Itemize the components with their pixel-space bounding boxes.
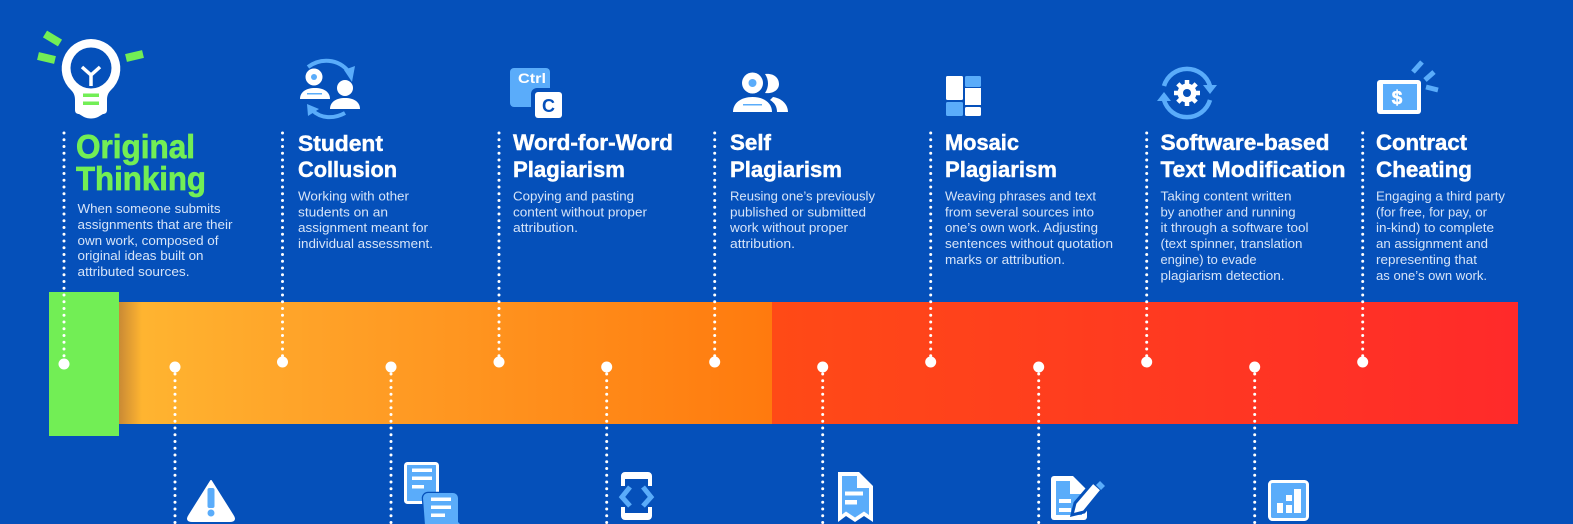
icon: bar chart screen — [1270, 482, 1308, 520]
connector: lower 5 — [1033, 362, 1044, 524]
text: mosaic description: from several sources into — [945, 206, 1094, 220]
icon: light bulb — [38, 34, 143, 118]
icon: document with chat bubble — [406, 464, 461, 524]
text: software-based description: plagiarism detection. — [1160, 269, 1284, 283]
icon: gear with cycle arrows — [1157, 69, 1217, 117]
text: original thinking description — [78, 202, 232, 279]
icon: torn document — [838, 472, 873, 522]
text: student collusion description: individual assessment. — [298, 237, 433, 251]
text: mosaic description — [945, 190, 1113, 267]
text: mosaic description: sentences without quotation — [945, 237, 1113, 251]
text: contract cheating description: as one’s own work. — [1376, 269, 1487, 283]
connector: mosaic — [925, 133, 936, 368]
text: student collusion description: students on an — [298, 206, 388, 220]
connector: original thinking — [58, 133, 70, 370]
text: student collusion description: assignment meant for — [298, 221, 428, 235]
text: self plagiarism description: work without proper — [729, 221, 848, 235]
heading: mosaic plagiarism — [945, 130, 1057, 182]
text: contract cheating description: representing that — [1376, 253, 1478, 267]
heading: original thinking: Thinking — [76, 160, 206, 197]
icon: ctrl c keys — [510, 68, 566, 122]
icon: mosaic blocks — [946, 76, 981, 116]
text: mosaic description: Weaving phrases and text — [945, 190, 1097, 204]
connector: lower 2 — [386, 362, 396, 524]
connector: word-for-word — [494, 133, 504, 368]
heading: original thinking: Original — [76, 128, 195, 165]
heading: original thinking — [76, 128, 206, 197]
text: software-based description: it through a software tool — [1160, 221, 1308, 235]
text: mosaic description: marks or attribution. — [945, 253, 1065, 267]
text: self plagiarism description — [729, 190, 876, 251]
severity spectrum bar — [119, 302, 1518, 424]
text: original thinking description: When someone submits — [78, 202, 220, 216]
text: word-for-word description — [513, 190, 647, 235]
text: self plagiarism description: attribution. — [730, 237, 795, 251]
text: software-based description: (text spinner, translation — [1160, 237, 1303, 251]
text: contract cheating description: an assignment and — [1376, 237, 1488, 251]
text: contract cheating description — [1376, 190, 1506, 283]
text: word-for-word description: content without proper — [513, 206, 647, 220]
heading: contract cheating: Cheating — [1376, 157, 1472, 182]
text: software-based description: engine) to evade — [1160, 253, 1257, 267]
heading: word-for-word plagiarism — [513, 130, 673, 182]
original thinking green block — [49, 292, 119, 436]
text: software-based description: by another and running — [1160, 206, 1296, 220]
heading: contract cheating — [1376, 130, 1472, 182]
heading: contract cheating: Contract — [1376, 130, 1468, 155]
icon: ctrl c keys: Ctrl — [518, 70, 546, 86]
text: software-based description: Taking content written — [1160, 190, 1292, 204]
icon: contract payment screen: $ — [1392, 88, 1403, 109]
connector: lower 3 — [601, 362, 612, 524]
text: original thinking description: attributed sources. — [78, 265, 190, 279]
text: original thinking description: own work, composed of — [78, 234, 219, 248]
text: word-for-word description: Copying and pasting — [513, 190, 634, 204]
heading: mosaic plagiarism: Mosaic — [945, 130, 1019, 155]
text: contract cheating description: in-kind) to complete — [1376, 221, 1494, 235]
text: contract cheating description: (for free, for pay, or — [1376, 206, 1487, 220]
heading: word-for-word plagiarism: Word-for-Word — [513, 130, 673, 155]
heading: mosaic plagiarism: Plagiarism — [945, 157, 1057, 182]
icon: self plagiarism people — [733, 72, 788, 112]
text: student collusion description: Working with other — [298, 190, 409, 204]
icon: code brackets — [621, 472, 652, 520]
heading: software-based text modification — [1160, 130, 1346, 182]
connector: self plagiarism — [709, 133, 720, 368]
connector: student collusion — [277, 133, 288, 368]
connector: contract cheating — [1357, 133, 1368, 368]
text: word-for-word description: attribution. — [513, 221, 578, 235]
connector: lower 6 — [1249, 362, 1260, 524]
text: original thinking description: original ideas built on — [78, 249, 204, 263]
heading: software-based text modification: Software-based — [1160, 130, 1330, 155]
heading: self plagiarism: Plagiarism — [730, 157, 842, 182]
text: contract cheating description: Engaging a third party — [1376, 190, 1506, 204]
heading: student collusion: Collusion — [298, 157, 397, 182]
heading: self plagiarism: Self — [730, 130, 772, 155]
icon: warning triangle — [188, 481, 234, 521]
text: mosaic description: one’s own work. Adjusting — [945, 221, 1098, 235]
heading: student collusion: Student — [298, 131, 384, 156]
icon: ctrl c keys: C — [542, 96, 555, 116]
text: software-based description — [1160, 190, 1308, 283]
icon: student collusion — [300, 61, 360, 117]
icon: contract payment screen — [1377, 62, 1438, 114]
text: self plagiarism description: published or submitted — [730, 206, 866, 220]
text: student collusion description — [298, 190, 433, 251]
text: original thinking description: assignments that are their — [78, 218, 232, 232]
text: self plagiarism description: Reusing one’s previously — [730, 190, 876, 204]
connector: lower 4 — [817, 362, 828, 524]
heading: student collusion — [298, 131, 397, 182]
heading: software-based text modification: Text Modification — [1160, 157, 1346, 182]
connector: software-based — [1141, 133, 1152, 368]
heading: word-for-word plagiarism: Plagiarism — [513, 157, 625, 182]
heading: self plagiarism — [730, 130, 842, 182]
connector: lower 1 — [170, 362, 180, 524]
icon: document with pencil — [1051, 476, 1105, 520]
